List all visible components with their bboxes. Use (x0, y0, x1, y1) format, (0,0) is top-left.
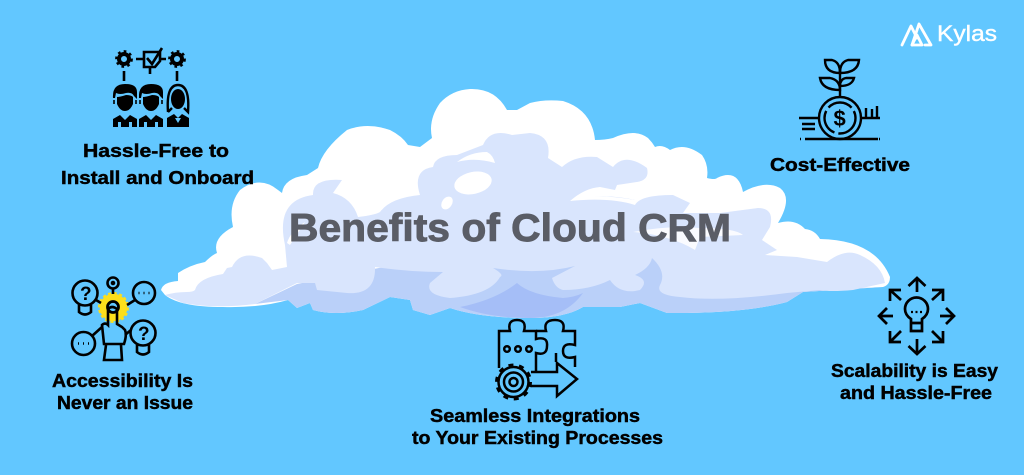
benefit: accessibility (52, 278, 193, 413)
benefit: seamless integrations (412, 320, 663, 448)
label: Scalability is Easy (831, 361, 998, 381)
question marks: ? (80, 284, 92, 305)
label: to Your Existing Processes (412, 428, 663, 448)
label: Cost-Effective (770, 155, 910, 175)
logo: Kylas (902, 21, 997, 46)
benefit: cost-effective (770, 60, 910, 175)
icon: puzzle, gear and arrow (496, 320, 577, 399)
illustration: cloud (161, 89, 890, 318)
dollar sign: $ (834, 106, 846, 131)
title: Benefits of Cloud CRM (289, 207, 731, 250)
icon: team with gears and checkbox (113, 48, 189, 127)
icon: finger touch with ideas (72, 278, 156, 360)
icon: logo mark (902, 24, 931, 45)
label: Hassle-Free to (83, 141, 229, 161)
benefit: scalability (831, 278, 998, 403)
label: Install and Onboard (61, 168, 254, 188)
icon: coin with plant (799, 60, 880, 139)
icon: light bulb with arrows (879, 278, 954, 354)
logo wordmark: Kylas (937, 21, 997, 46)
question marks: ? (138, 324, 150, 345)
benefit: hassle-free install (61, 48, 254, 188)
label: Never an Issue (57, 393, 193, 413)
label: and Hassle-Free (840, 383, 992, 403)
label: Accessibility Is (52, 371, 193, 391)
label: Seamless Integrations (430, 406, 640, 426)
